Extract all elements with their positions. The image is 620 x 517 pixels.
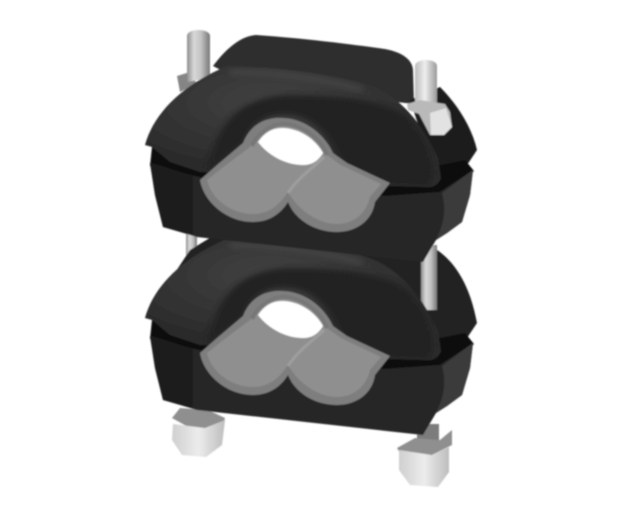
- rear upper-left bolt: [177, 30, 210, 92]
- upper clamp rear top: [213, 35, 414, 104]
- upper-right bolt and nut: [407, 60, 452, 135]
- bolts between the clamps: [186, 228, 197, 262]
- upper clamp rear right flank: [410, 87, 477, 180]
- bottom-left nut: [172, 408, 225, 457]
- lower clamp bolt segment: [421, 245, 437, 310]
- lower clamp: [145, 236, 477, 435]
- lower clamp rear dome: [145, 236, 477, 352]
- upper clamp: [145, 35, 477, 262]
- bottom-right nut: [397, 424, 452, 487]
- upper clamp body: [145, 66, 474, 262]
- lower clamp body: [145, 239, 474, 435]
